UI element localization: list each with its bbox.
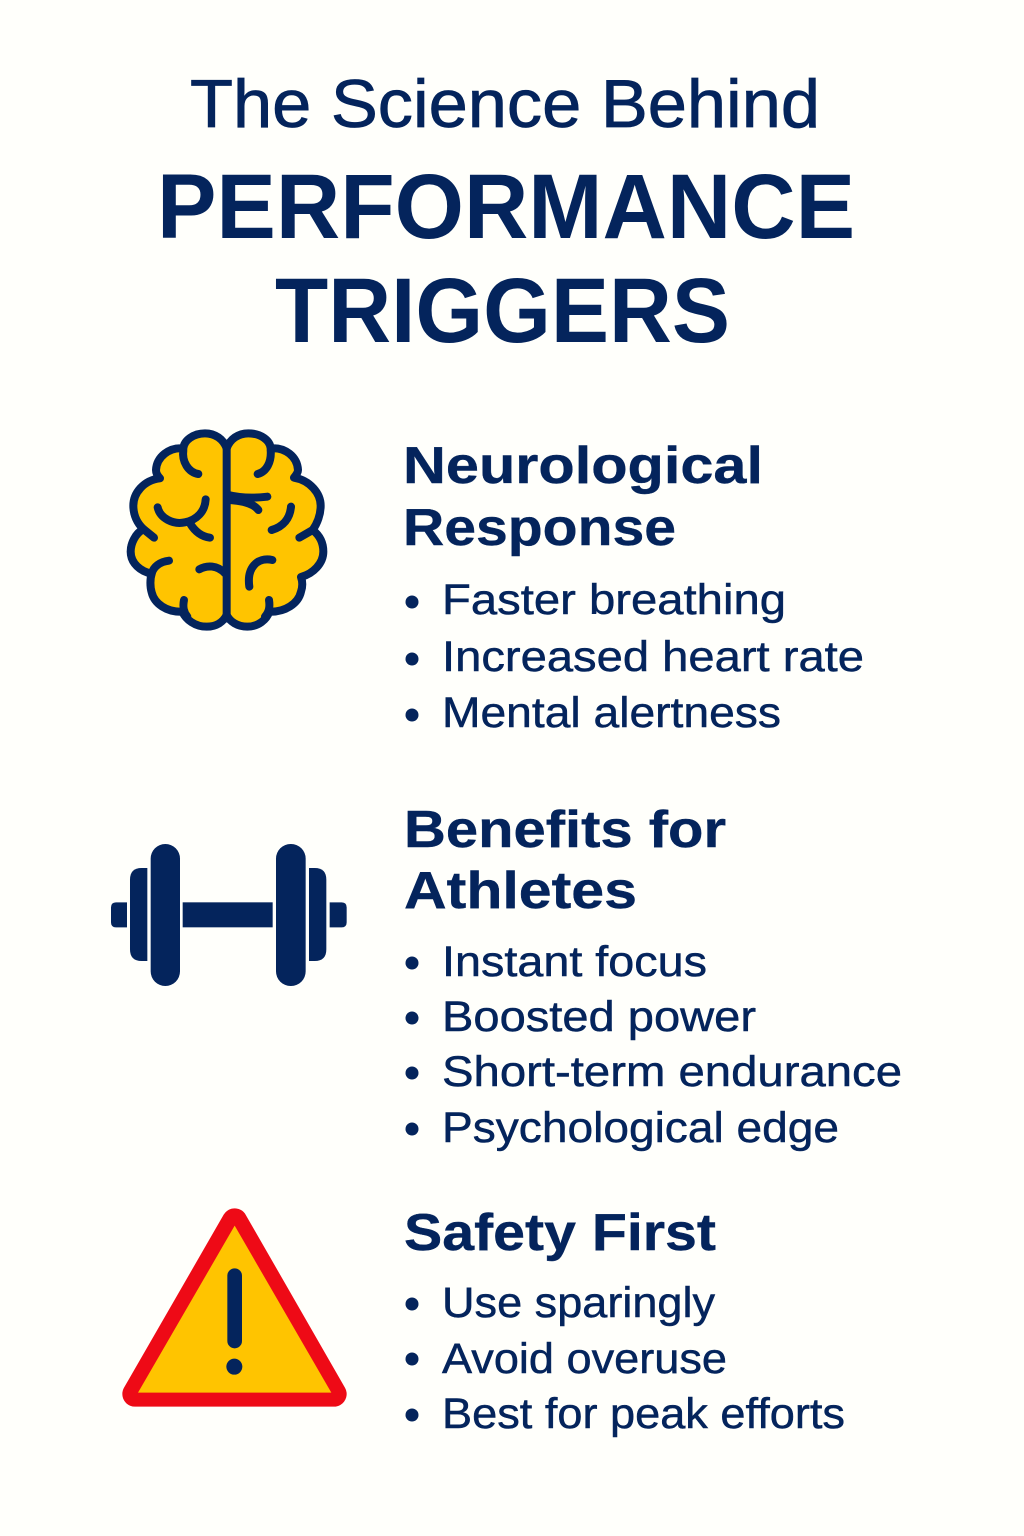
- bullet list: neurological response: [406, 576, 864, 737]
- bullet list: neurological response: Faster breathing: [442, 576, 786, 624]
- bullet list: safety first: Best for peak efforts: [442, 1390, 845, 1438]
- panel: benefits for athletes: [111, 801, 902, 1152]
- panel: neurological response: [131, 433, 864, 737]
- title: [157, 66, 855, 362]
- panel: safety first: [135, 1204, 845, 1438]
- bullet list: safety first: Use sparingly: [442, 1279, 716, 1327]
- heading: safety first: Safety First: [404, 1204, 716, 1262]
- bullet list: benefits for athletes: Psychological edge: [442, 1104, 839, 1152]
- heading: neurological response: [403, 437, 763, 557]
- icon: brain: [131, 433, 323, 627]
- icon: warning triangle: [135, 1221, 334, 1394]
- heading: benefits for athletes: Benefits for: [404, 801, 726, 859]
- bullet list: neurological response: Increased heart rate: [442, 633, 864, 681]
- bullet list: benefits for athletes: [406, 938, 902, 1152]
- bullet list: neurological response: Mental alertness: [442, 689, 781, 737]
- icon: dumbbell: [111, 844, 347, 986]
- heading: benefits for athletes: Athletes: [404, 862, 637, 920]
- title: TRIGGERS: [275, 260, 730, 362]
- title: The Science Behind: [190, 66, 820, 142]
- bullet list: benefits for athletes: Boosted power: [442, 993, 756, 1041]
- bullet list: safety first: [406, 1279, 845, 1438]
- bullet list: benefits for athletes: Short-term endurance: [442, 1048, 902, 1096]
- bullet list: safety first: Avoid overuse: [442, 1335, 727, 1383]
- bullet list: benefits for athletes: Instant focus: [442, 938, 707, 986]
- heading: neurological response: Response: [403, 499, 676, 557]
- heading: neurological response: Neurological: [403, 437, 763, 495]
- heading: benefits for athletes: [404, 801, 726, 920]
- title: PERFORMANCE: [157, 156, 855, 258]
